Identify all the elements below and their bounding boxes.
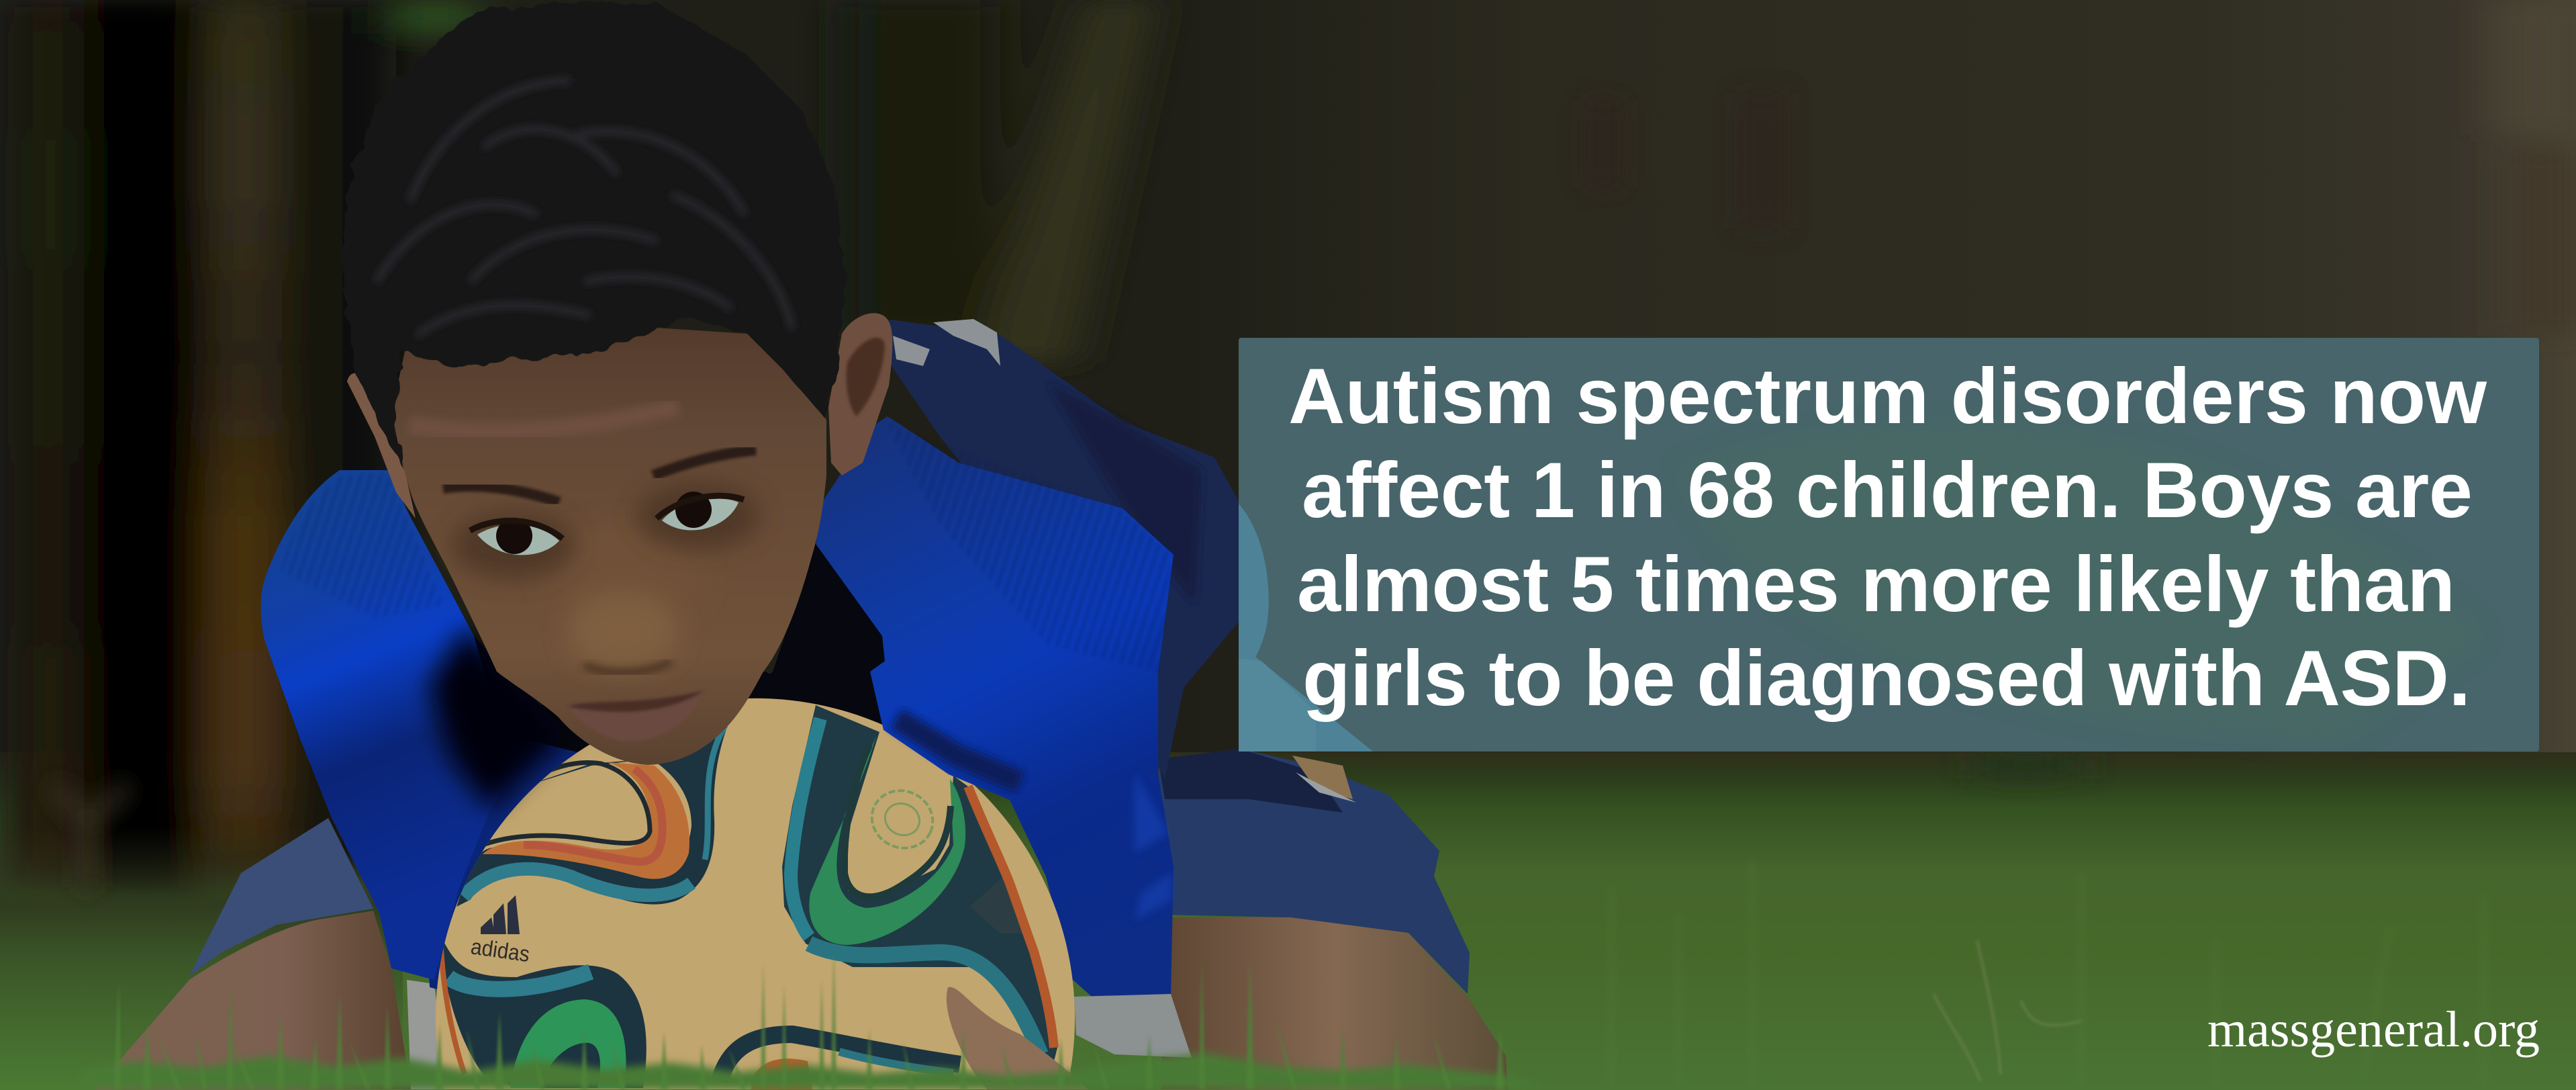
forehead crease xyxy=(410,406,678,432)
left leg xyxy=(95,911,411,1089)
inner dark line of green swirl xyxy=(845,745,951,897)
back of shirt xyxy=(866,320,1242,779)
right shorts xyxy=(1158,749,1470,994)
lower left teal xyxy=(448,972,591,989)
teal swoosh below orange xyxy=(463,869,691,897)
hair xyxy=(340,3,846,471)
adidas logo xyxy=(469,895,531,966)
dark fold on left sleeve xyxy=(430,628,569,810)
cheek glow xyxy=(544,524,705,631)
adidas logo: adidas xyxy=(469,934,531,966)
hand on ball xyxy=(947,987,1088,1089)
left edge orange stripe xyxy=(440,938,465,1075)
right eye xyxy=(657,492,744,531)
green sliver at top left xyxy=(530,741,587,773)
outline of top left panel xyxy=(483,763,650,845)
nose xyxy=(567,591,679,672)
grass blades xyxy=(114,946,1504,1089)
orange edge stripe xyxy=(968,786,1054,1048)
main message text: almost 5 times more likely than xyxy=(1297,540,2455,628)
bottom band xyxy=(720,1034,960,1081)
soft grass streaks xyxy=(1611,860,2484,1089)
soccer ball xyxy=(436,698,1075,1089)
right eyebrow xyxy=(653,450,756,475)
right leg xyxy=(1161,917,1508,1089)
right sock xyxy=(1074,994,1192,1058)
left ear xyxy=(347,373,416,518)
dry grass stalks on the right xyxy=(1934,940,2081,1081)
right sleeve xyxy=(816,416,1174,997)
sleeve bulge over ball xyxy=(870,631,1081,800)
pocket detail xyxy=(1292,756,1353,799)
lower left band dark xyxy=(443,940,647,1088)
lower left green swirl xyxy=(510,999,626,1088)
hair strands xyxy=(376,81,792,336)
teal band lower right xyxy=(809,944,1041,1054)
sleeve highlight stripes xyxy=(1135,772,1172,920)
greenish glow inside the panel xyxy=(1678,426,2484,739)
dark star right of centre xyxy=(782,705,1057,1075)
pocket showing through the panel xyxy=(1239,658,1316,752)
panel background xyxy=(1239,338,2539,752)
blurred sprig in background xyxy=(54,786,128,887)
white shirt stripes xyxy=(893,319,1000,366)
left eye xyxy=(470,518,563,555)
green swirl xyxy=(809,735,965,945)
faint reddish smudges xyxy=(1584,94,1786,228)
dark triangle speckle xyxy=(970,873,1027,934)
main message text: girls to be diagnosed with ASD. xyxy=(1302,634,2471,722)
lips xyxy=(567,690,704,741)
left eye socket shadow xyxy=(452,512,575,579)
sleeve showing through the panel xyxy=(1239,504,1373,752)
left teal arm xyxy=(791,719,820,937)
right ear xyxy=(828,313,892,475)
main message text: affect 1 in 68 children. Boys are xyxy=(1302,446,2473,534)
navy filler between left sleeve and ball xyxy=(416,712,604,1021)
shadow along the sleeve edge xyxy=(896,719,1020,782)
face xyxy=(392,322,826,765)
left sleeve xyxy=(260,470,526,980)
callout panel xyxy=(1239,338,2539,752)
main message text xyxy=(1288,352,2487,722)
dark chest under the boy xyxy=(416,477,892,810)
right eye socket shadow xyxy=(636,482,760,549)
orange swirl xyxy=(483,762,689,879)
website logo text: massgeneral.org xyxy=(2207,1001,2540,1058)
photo of boy with soccer ball xyxy=(81,3,1544,1089)
orange patch bottom xyxy=(751,1058,812,1089)
main message text: Autism spectrum disorders now xyxy=(1288,352,2487,440)
left sock xyxy=(407,980,446,1089)
left shorts xyxy=(189,818,373,976)
grass strip at the bottom xyxy=(81,1053,1544,1089)
dark band left of centre xyxy=(457,727,728,907)
left eyebrow xyxy=(443,486,559,502)
green stamp xyxy=(863,780,942,858)
